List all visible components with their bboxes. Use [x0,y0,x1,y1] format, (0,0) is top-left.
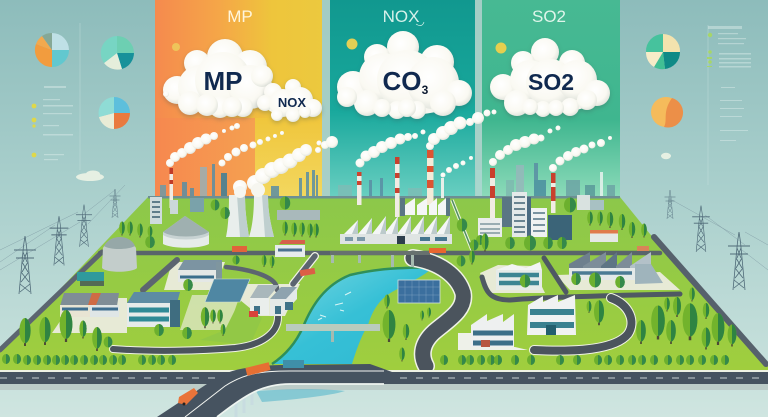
building: factory F [496,262,542,290]
icon: blue bus [283,360,304,368]
pie chart: left 1 [35,33,69,67]
building: factory H [527,295,576,335]
roads [0,237,766,366]
building: rear centre [178,260,222,282]
solar panel left [205,279,250,302]
ground [0,196,768,372]
building: teal roof [127,292,180,327]
pie chart: right 2 [651,97,683,128]
silo [102,237,137,272]
small background clouds [76,153,671,181]
trees: centre [383,234,625,362]
river bridge [286,324,380,342]
icon: orange truck [178,388,198,406]
storage dome [163,216,209,248]
river [272,267,433,364]
pylons: right [664,190,768,290]
cloud: NOX small [257,79,322,122]
chimneys [170,150,556,218]
skyline [160,163,615,203]
legend: left [32,23,80,170]
overpass bridge [157,360,392,417]
city buildings right [478,192,618,242]
upper overpass [330,251,430,267]
small sun markers [172,38,506,54]
cloud: CO3 [337,31,472,119]
main road [0,370,768,390]
cloud: CO3: CO [382,66,422,96]
panel: MP [155,0,322,200]
heading: SO2: SO2 [532,7,566,26]
building: twin grey [250,285,297,316]
cloud: SO2: SO2 [528,69,574,95]
panel: SO2 [482,0,620,200]
trees: right foreground [440,288,736,365]
legend: right [707,25,751,185]
building: grey with red truck [232,240,649,317]
building: sawtooth G [569,252,663,284]
trees: upper row [119,196,647,250]
cloud: MP: MP [204,66,242,96]
factory: power plant [340,198,452,244]
pie chart: right 1 [646,34,680,69]
pale plots [52,262,680,333]
pie chart: left 3 [98,97,130,129]
cloud: MP [163,39,273,118]
cloud: NOX small: NOX [278,95,306,110]
heading: MP: MP [227,7,253,26]
pie chart: left 2 [101,36,134,70]
city buildings left [150,197,320,224]
building: low left [60,293,119,317]
heading: NOX: NOX [383,7,419,26]
cloud: SO2 [490,38,610,117]
icon: orange lorry [245,362,271,376]
cloud: CO3: 3 [422,83,429,97]
cooling towers [226,183,274,237]
solar panel right [398,280,440,303]
pylons: left [0,185,125,294]
panel: NOX [330,0,475,200]
building: factory I [458,314,528,350]
building: small teal [77,272,104,286]
plumes of smoke [166,110,612,194]
trees: left foreground [2,255,274,365]
